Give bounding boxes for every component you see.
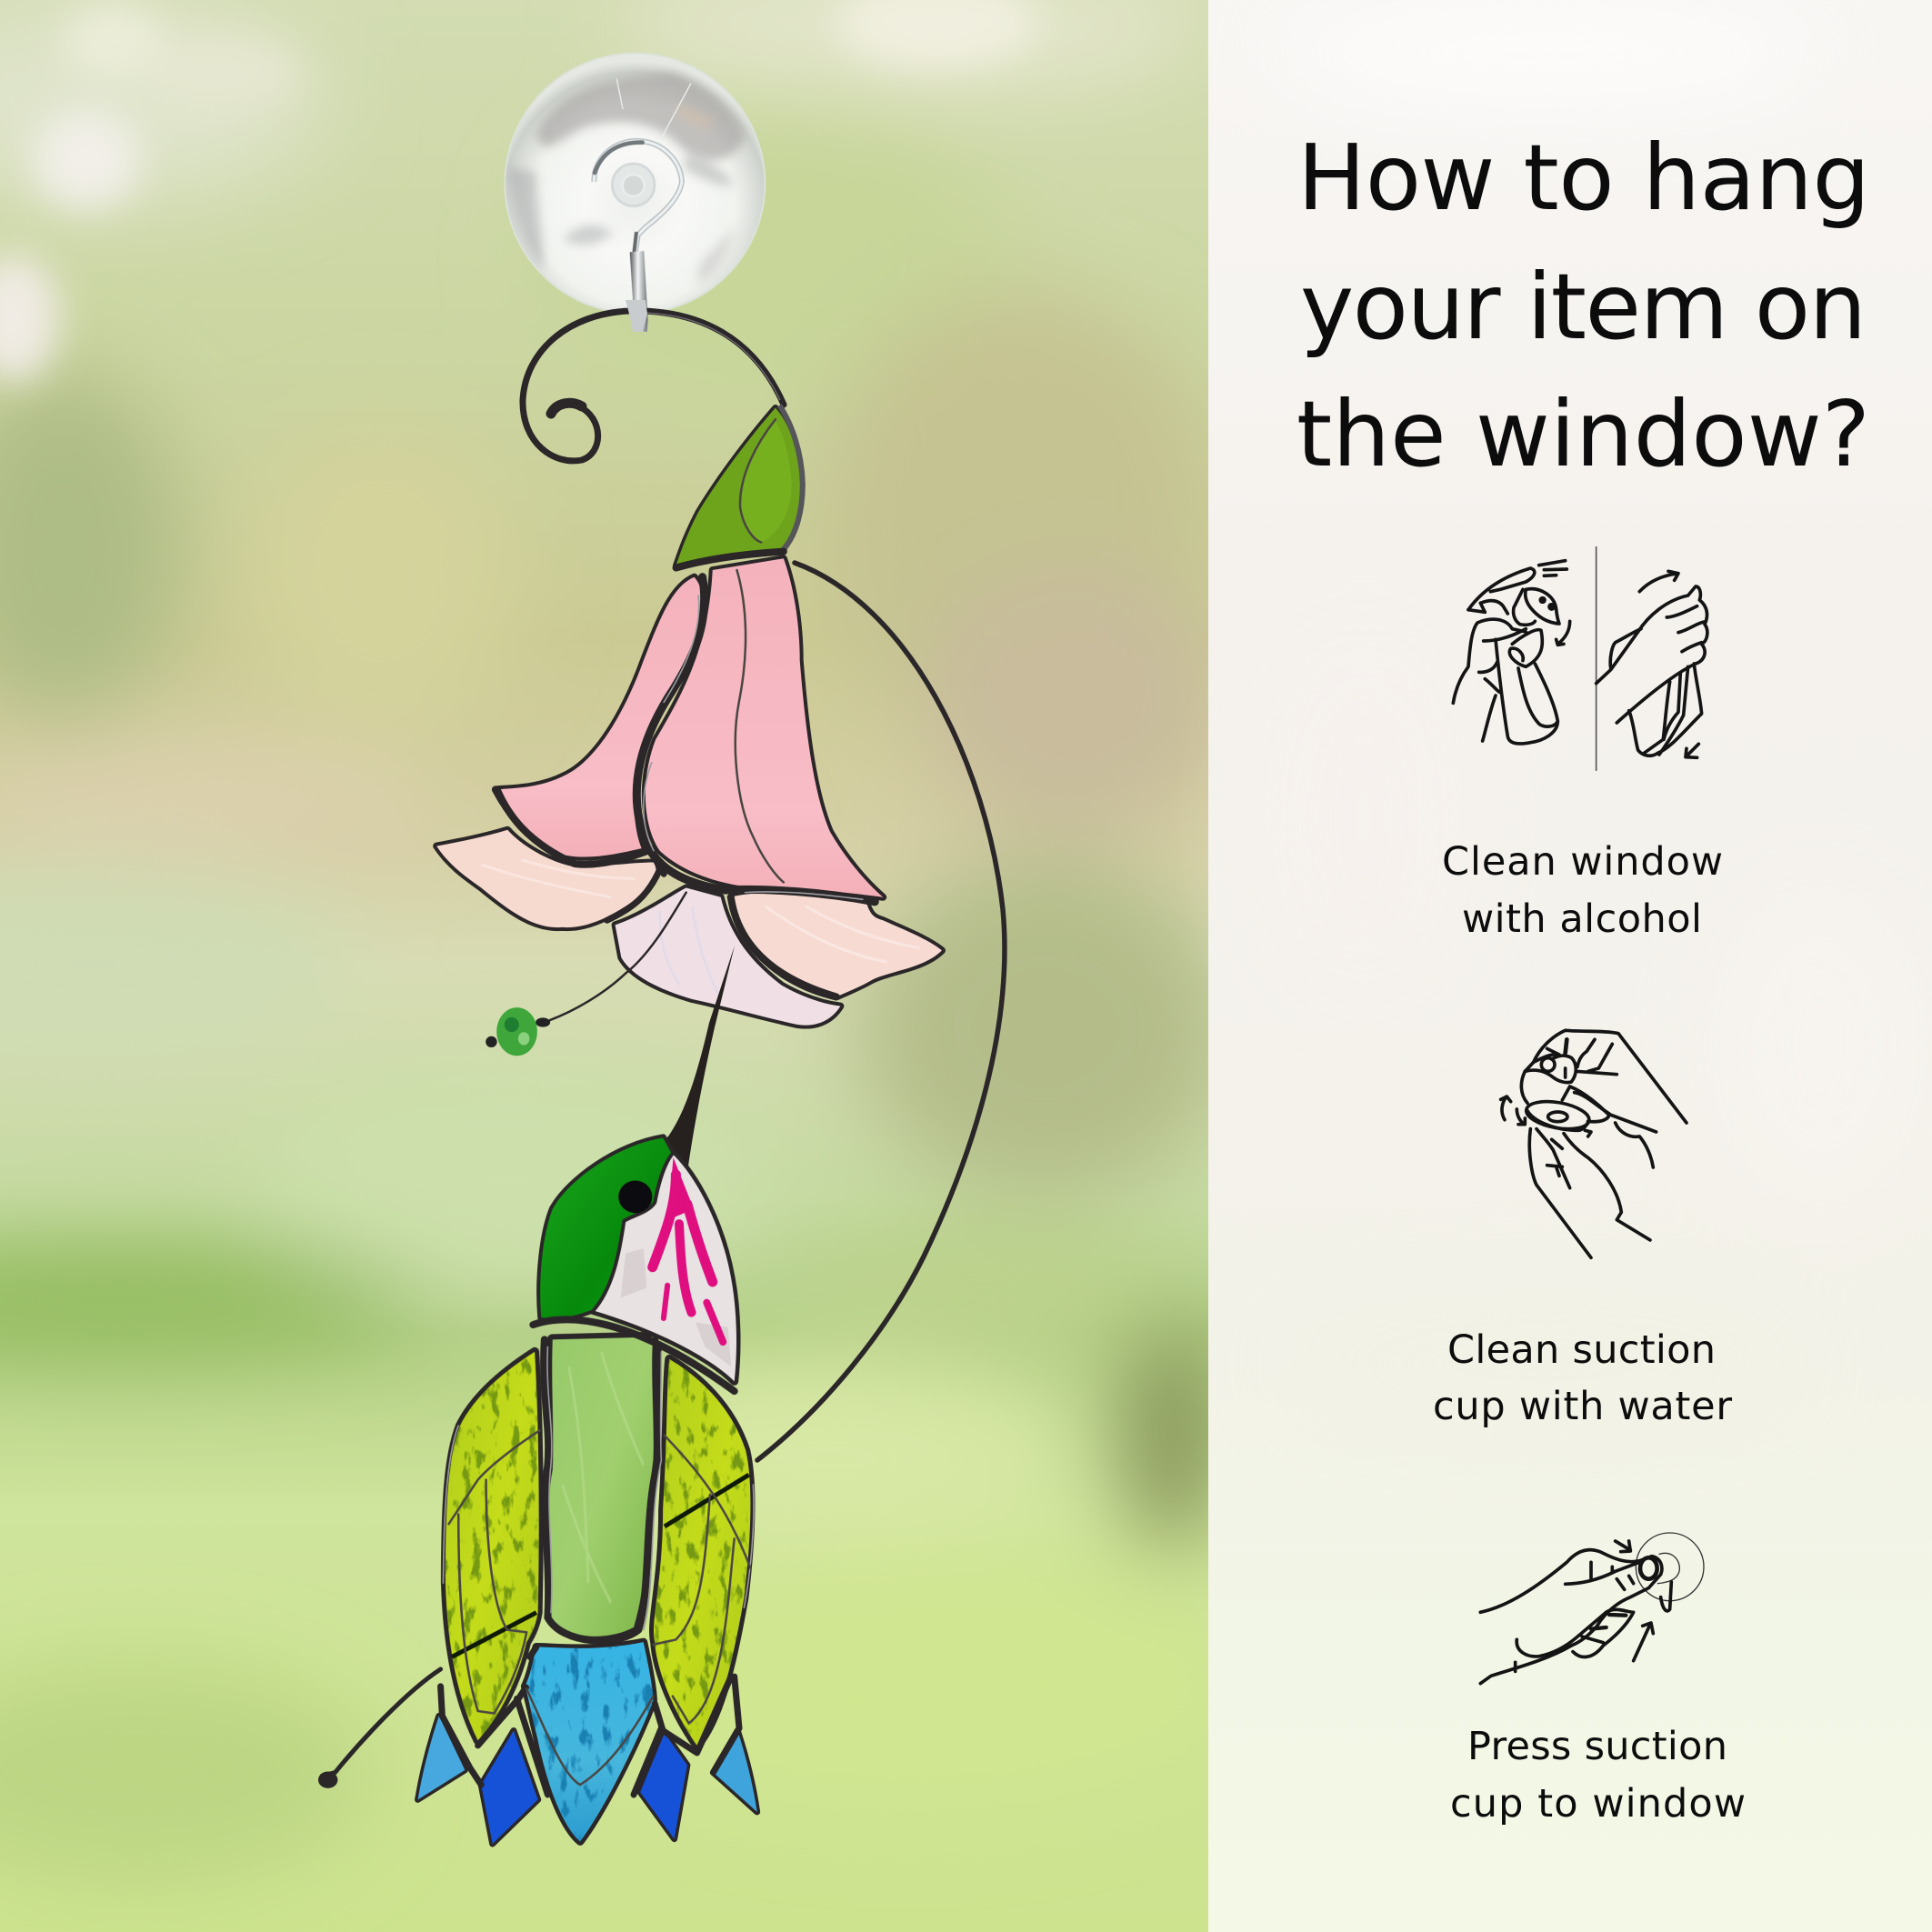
- calyx: [676, 405, 803, 566]
- lead outlines: [441, 1319, 739, 1795]
- icon: spray and wipe window: [1453, 547, 1707, 770]
- petal vein: [736, 570, 784, 882]
- label: press suction cup: Press suction: [1467, 1724, 1727, 1769]
- suction cup: [505, 53, 766, 332]
- petal: lower right: [731, 893, 942, 996]
- label: clean window: Clean window: [1442, 839, 1723, 885]
- wing veins: [449, 1430, 751, 1785]
- left wing: [445, 1352, 539, 1740]
- petal streaks: [481, 860, 919, 999]
- tail wire: [322, 1669, 441, 1776]
- label: clean suction cup: [1433, 1327, 1732, 1429]
- hook tip over wire: [626, 300, 647, 332]
- title: your item on: [1300, 254, 1867, 360]
- label: clean suction cup: cup with water: [1433, 1384, 1732, 1429]
- throat white: [592, 1153, 736, 1381]
- icon: press suction cup: [1480, 1533, 1704, 1684]
- lead highlights: [644, 596, 863, 899]
- label: clean window: [1442, 839, 1723, 942]
- blue centre tail: [525, 1642, 653, 1841]
- body green: [548, 1337, 654, 1637]
- title: the window?: [1296, 381, 1870, 487]
- long support wire: [757, 563, 1005, 1460]
- title: [1296, 125, 1870, 487]
- flower: [436, 405, 942, 1056]
- label: clean window: with alcohol: [1462, 896, 1702, 942]
- hanging wire with spiral: [523, 311, 784, 461]
- petal: left pink: [496, 577, 703, 857]
- eye: [618, 1180, 652, 1213]
- hummingbird: [318, 1137, 757, 1844]
- panel: instructions background: [1208, 0, 1932, 1932]
- right wing: [654, 1359, 750, 1746]
- label: press suction cup: cup to window: [1450, 1781, 1746, 1827]
- bead wire and bead: [486, 893, 686, 1056]
- petal: centre pink: [646, 558, 883, 897]
- petal: lower middle: [616, 888, 840, 1026]
- petal: lower left: [436, 830, 656, 927]
- head green: [540, 1137, 671, 1318]
- hook shaft: [630, 251, 648, 332]
- title: How to hang: [1297, 125, 1870, 231]
- body streaks: [562, 1352, 644, 1603]
- hook loop: [594, 141, 682, 255]
- outer tail feathers: [418, 1716, 757, 1844]
- label: clean suction cup: Clean suction: [1447, 1327, 1716, 1373]
- label: press suction cup: [1450, 1724, 1746, 1827]
- lead highlights: [443, 1346, 754, 1630]
- throat shimmer: [621, 1248, 731, 1366]
- throat pink marks: [653, 1157, 723, 1342]
- lead lines: [497, 552, 875, 996]
- icon: clean suction cup: [1501, 1030, 1687, 1257]
- window shadow lines: [452, 1475, 749, 1657]
- hummingbird beak: [640, 946, 735, 1173]
